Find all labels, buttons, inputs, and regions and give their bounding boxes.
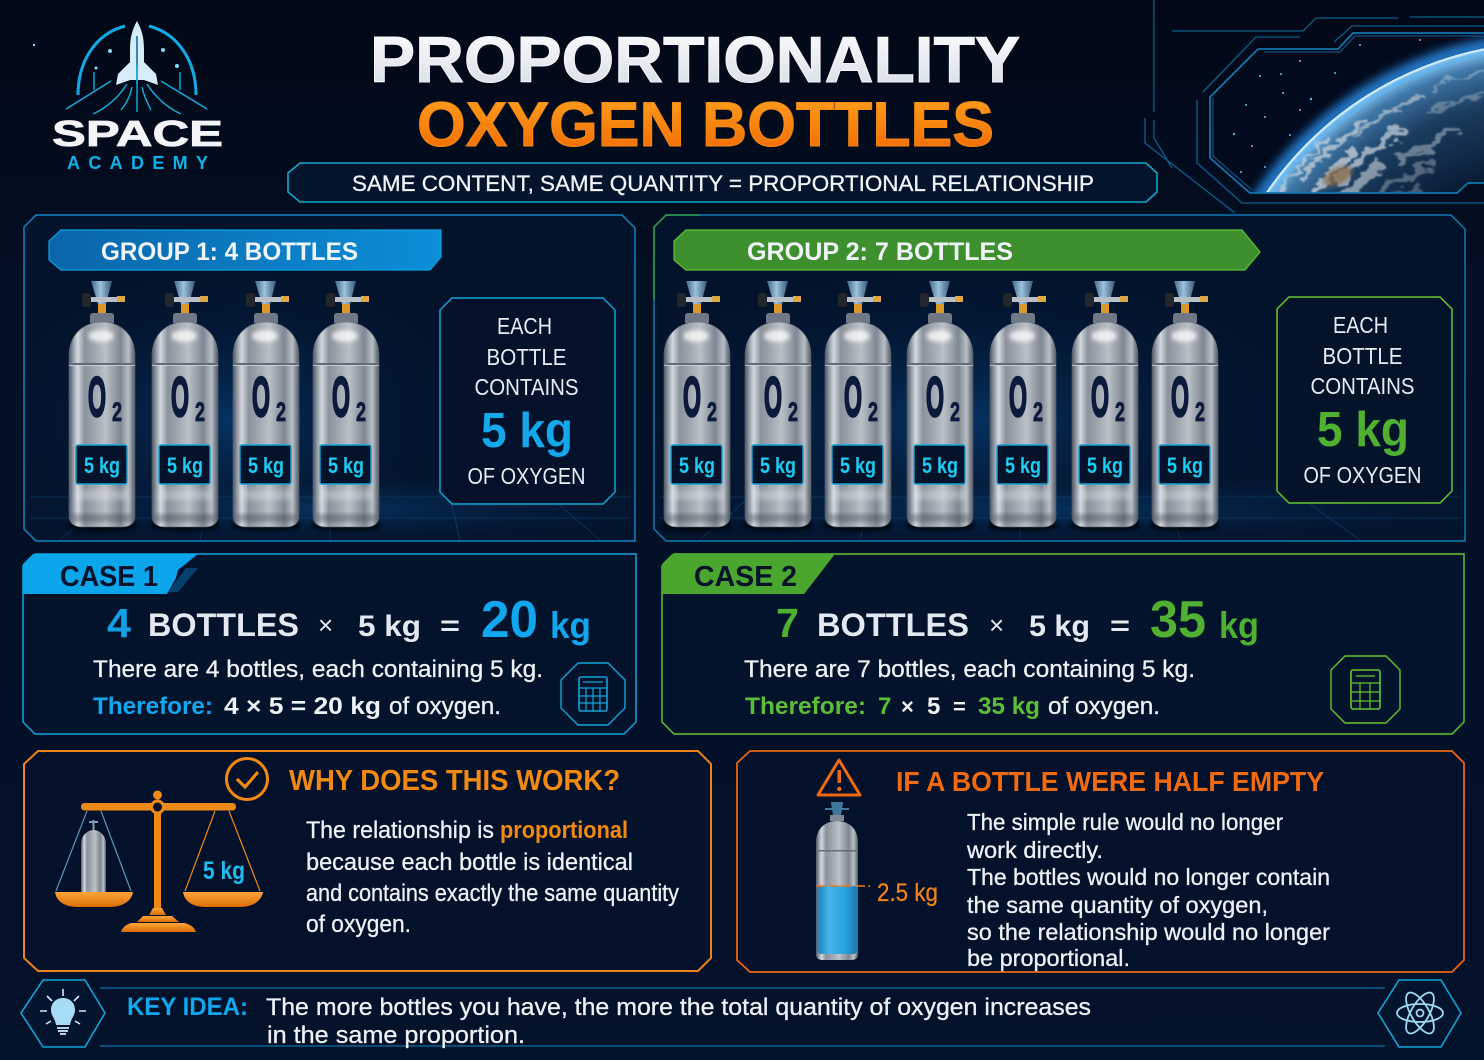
HUD frame lines [1145,0,1484,213]
bottle 5: O [1009,365,1027,428]
logo wordmark: SPACE [52,113,223,154]
bottle 2: 2 [788,397,798,427]
case 2 equation: 35 [1150,591,1206,649]
bottle 5 [987,281,1059,531]
case 2 explanation: There are 7 bottles, each containing 5 kg. [744,656,1195,683]
why text [306,817,679,938]
callout: group 1 each bottle: EACH [497,313,552,339]
half empty text: work directly. [966,837,1103,863]
bottle 7: 2 [1195,397,1205,427]
bottle 1: O [683,365,701,428]
case 1 explanation: There are 4 bottles, each containing 5 kg. [93,656,543,683]
group 2 header: GROUP 2: 7 BOTTLES [747,238,1013,266]
bottle 4: O [332,365,350,428]
case 2 explanation: × [901,694,914,719]
case 1 equation: BOTTLES [148,607,299,643]
bottle 4: 5 kg [922,453,958,478]
case 1 equation: × [318,610,333,640]
icon: light bulb [21,980,105,1047]
half empty text: the same quantity of oxygen, [967,892,1268,918]
case 2 equation: kg [1219,605,1259,646]
bottle 2 [149,281,221,531]
bottle 2: O [764,365,782,428]
small bottle [81,820,106,892]
bottle row glow [656,275,1266,540]
case 2 explanation: 7 [878,693,891,720]
case 2 equation: = [1110,610,1130,641]
earth window [1209,32,1484,194]
2.5 kg label: 2.5 kg [877,879,938,907]
bottle 7 [1149,281,1221,531]
case 2 explanation: Therefore: [745,693,866,720]
bottle 3: 5 kg [840,453,876,478]
case 1 equation: = [440,610,460,641]
half empty text: so the relationship would no longer [967,919,1330,945]
case 1 equation: 20 [481,591,538,649]
bottle row glow [26,275,436,540]
half empty heading: IF A BOTTLE WERE HALF EMPTY [896,766,1324,797]
5 kg label: 5 kg [203,857,245,885]
case 1 equation [107,591,591,649]
bottle 3: 5 kg [248,453,284,478]
panel: case 1 [23,554,636,734]
case 2 explanation: 35 kg [978,693,1040,720]
case 2 explanation: of oxygen. [1048,693,1160,720]
half empty text: be proportional. [967,945,1130,971]
bottle 3 [822,281,894,531]
bottle 6: 2 [1115,397,1125,427]
case 1 equation: kg [550,605,591,646]
panel: group 1 [24,215,635,541]
bottle 6: O [1091,365,1109,428]
bottle 1: 2 [112,397,122,427]
case 2 equation: 5 kg [1029,610,1090,643]
callout: group 1 each bottle [440,298,615,504]
panel: if a bottle were half empty [737,751,1464,972]
case 2 explanation: = [953,694,966,719]
key idea text: in the same proportion. [267,1022,525,1049]
icon: atom [1378,980,1461,1047]
bottle 1 [661,281,733,531]
bottle 3: 2 [276,397,286,427]
bottle 6 [1069,281,1141,531]
callout: group 1 each bottle: OF OXYGEN [468,463,586,489]
panel: group 2 [654,215,1465,541]
case 1 tab: CASE 1 [60,561,158,593]
bottle 2: 2 [195,397,205,427]
bottle 2: O [171,365,189,428]
bottle 3 [230,281,302,531]
title [370,23,1020,160]
icon: calculator [561,663,625,725]
case 1 explanation [93,656,543,720]
bottle 4 [310,281,382,531]
title: PROPORTIONALITY [370,23,1020,96]
key idea text: The more bottles you have, the more the total quantity of oxygen increases [266,994,1091,1021]
bottle 2 [742,281,814,531]
case 2 equation: × [989,610,1004,640]
case 2 equation: BOTTLES [817,607,969,643]
bottle 3: O [252,365,270,428]
key idea label: KEY IDEA: [127,993,248,1021]
group 1 header: GROUP 1: 4 BOTTLES [101,238,358,266]
case 1 explanation: 4 × 5 = 20 kg [224,693,381,720]
case 1 explanation: of oxygen. [389,693,501,720]
callout: group 2 each bottle: OF OXYGEN [1304,462,1422,488]
half empty text: The simple rule would no longer [967,809,1283,835]
group 1 header [49,230,441,270]
bottle 1: 2 [707,397,717,427]
bottle 6: 5 kg [1087,453,1123,478]
bottle 4: 2 [950,397,960,427]
panel: case 2 [662,554,1464,734]
bottle 3: O [844,365,862,428]
panel: why does this work [24,751,711,971]
half-filled bottle [816,803,870,960]
case 2 explanation [744,656,1195,720]
bottle 2: 5 kg [760,453,796,478]
callout: group 1 each bottle: 5 kg [481,404,573,458]
icon: warning triangle [818,760,860,795]
bottle 1: 5 kg [84,453,120,478]
key idea bar [21,980,1461,1049]
bottle 4: O [926,365,944,428]
callout: group 2 each bottle: CONTAINS [1310,373,1414,399]
why text: because each bottle is identical [306,849,633,876]
floor glow [25,478,634,540]
bottle 7: O [1171,365,1189,428]
half empty text [966,809,1330,971]
why text: of oxygen. [306,911,411,938]
callout: group 2 each bottle: BOTTLE [1322,343,1402,369]
bottle 1: O [88,365,106,428]
bottle 3: 2 [868,397,878,427]
case 1 equation: 4 [107,600,131,646]
case 2 explanation: 5 [927,693,940,720]
half empty text: The bottles would no longer contain [967,864,1330,890]
why text: The relationship is [306,817,494,844]
case 2 tab: CASE 2 [694,561,797,593]
bottle 1: 5 kg [679,453,715,478]
icon: calculator [1331,656,1400,723]
case 1 explanation: Therefore: [93,693,213,720]
subtitle banner: SAME CONTENT, SAME QUANTITY = PROPORTIONAL RELATIONSHIP [352,171,1094,196]
bottle 4: 5 kg [328,453,364,478]
callout: group 2 each bottle: EACH [1333,312,1388,338]
case 2 tab [662,554,835,594]
title second line: OXYGEN BOTTLES [417,90,994,160]
case 2 equation [776,591,1259,649]
logo subtitle: ACADEMY [67,153,208,173]
bottle 1 [66,281,138,531]
group 2 header [674,230,1260,270]
case 1 equation: 5 kg [358,610,421,643]
why text: proportional [500,817,628,844]
key idea text [266,994,1091,1049]
callout: group 2 each bottle [1277,297,1452,503]
icon: check circle [226,758,268,800]
callout: group 1 each bottle: CONTAINS [474,374,578,400]
floor glow [655,478,1464,540]
why heading: WHY DOES THIS WORK? [289,765,620,797]
bottle 4 [904,281,976,531]
case 2 equation: 7 [776,600,799,646]
subtitle banner [288,163,1157,202]
why text: and contains exactly the same quantity [306,880,679,907]
callout: group 2 each bottle: 5 kg [1317,403,1409,457]
bottle 5: 2 [1033,397,1043,427]
icon: balance scale [55,790,263,932]
logo: Space Academy [33,21,223,173]
bottle 4: 2 [356,397,366,427]
bottle 2: 5 kg [167,453,203,478]
bottle 7: 5 kg [1167,453,1203,478]
bottle 5: 5 kg [1005,453,1041,478]
case 1 tab [23,554,198,594]
callout: group 1 each bottle: BOTTLE [486,344,566,370]
